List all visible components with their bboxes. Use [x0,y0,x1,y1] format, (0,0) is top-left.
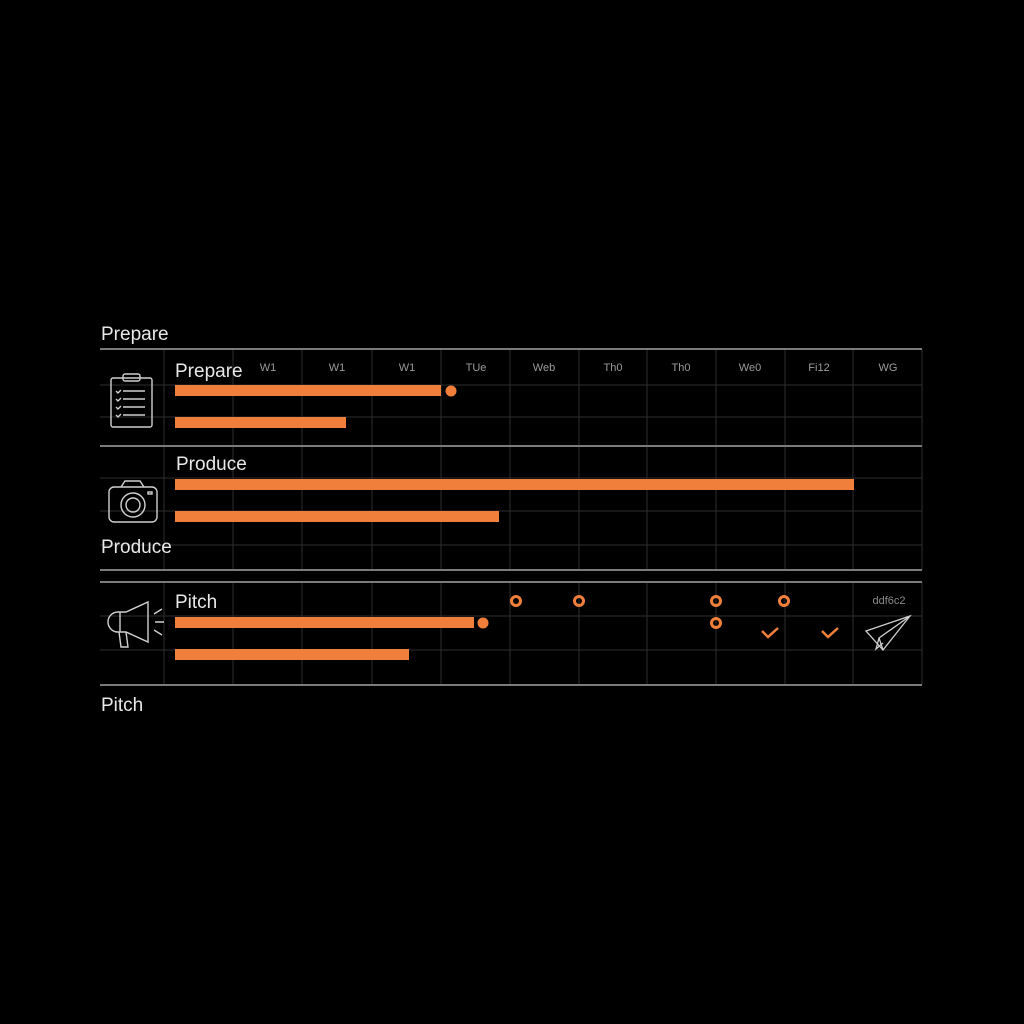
code label: ddf6c2 [872,595,906,607]
column headers: Th0 [604,362,622,374]
icon: camera [109,481,157,522]
column headers: Th0 [672,362,690,374]
column headers: W1 [260,362,276,374]
panel: pitch [101,592,910,716]
heading: Prepare: Prepare [175,361,243,382]
column headers: Fi12 [808,362,830,374]
column headers: We0 [739,362,761,374]
column headers [260,362,897,374]
milestones [512,596,838,637]
bars [175,479,854,522]
heading: Pitch: Pitch [175,592,217,613]
panel: prepare [111,361,456,428]
outer label: Pitch: Pitch [101,695,143,716]
column headers: TUe [466,362,486,374]
column headers: W1 [329,362,345,374]
heading: Produce: Produce [176,454,247,475]
column headers: WG [879,362,897,374]
column headers: Web [533,362,555,374]
bars [175,617,488,660]
outer label: Prepare: Prepare [101,324,169,345]
outer label: Produce: Produce [101,537,172,558]
icon: megaphone [108,602,164,647]
bars [175,385,456,428]
icon: clipboard [111,374,152,427]
column headers: W1 [399,362,415,374]
icon: paper plane [866,616,910,650]
panel: produce [101,454,854,558]
